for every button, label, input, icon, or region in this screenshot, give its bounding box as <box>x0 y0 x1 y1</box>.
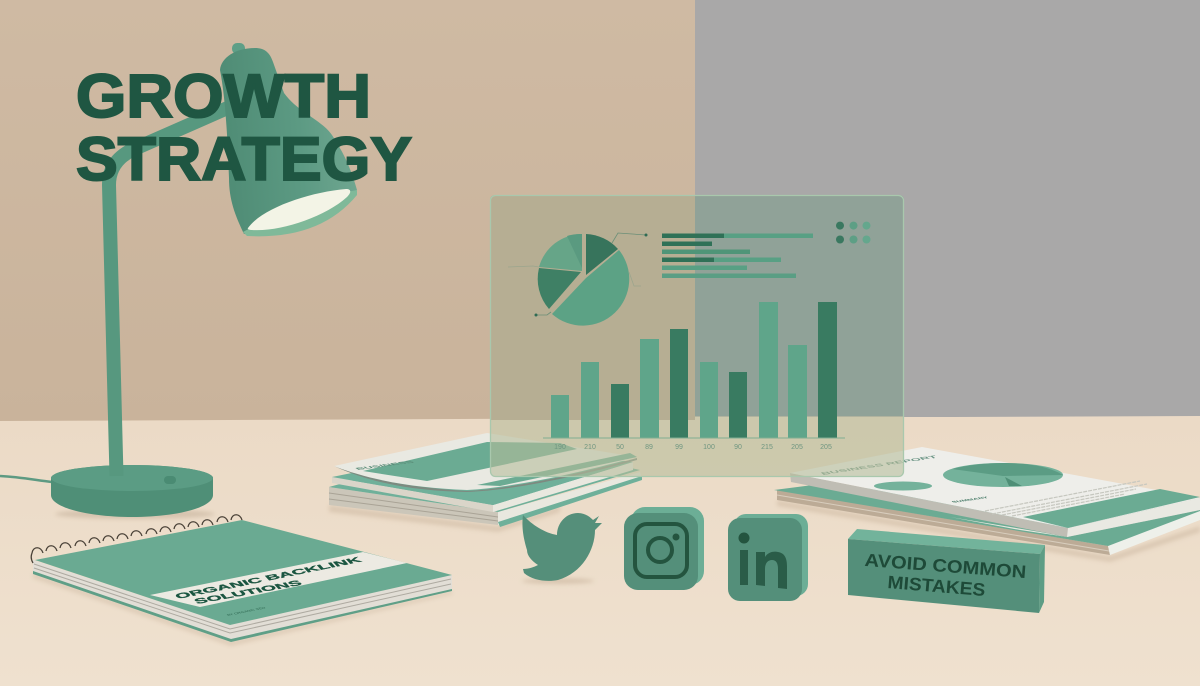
wall: grey right <box>695 0 1200 417</box>
notebook spiral binding <box>31 515 242 563</box>
brochure stack: right <box>774 447 1200 562</box>
axis labels: 205 <box>820 444 832 451</box>
icon: instagram block <box>624 507 704 590</box>
desk surface <box>0 416 1200 686</box>
report pie chart <box>943 463 1063 487</box>
axis labels: 50 <box>616 444 624 451</box>
brochure stack: right: BUSINESS REPORT <box>819 455 940 476</box>
lamp stem and arm <box>109 106 232 476</box>
icon: twitter bird <box>522 513 602 584</box>
axis labels: 100 <box>703 444 715 451</box>
brochure top sheet <box>334 458 637 492</box>
callout block: avoid common mistakes: MISTAKES <box>887 572 986 600</box>
axis labels: 190 <box>554 444 566 451</box>
icon: linkedin block <box>728 514 808 601</box>
lamp shade <box>220 43 357 236</box>
notebook title <box>173 556 365 606</box>
notebook cover <box>35 520 452 625</box>
lamp cord <box>0 476 52 482</box>
bar chart <box>543 302 845 451</box>
glass dashboard panel <box>490 195 904 476</box>
horizontal bars <box>662 234 813 278</box>
axis labels: 205 <box>791 444 803 451</box>
brochure stack: left <box>329 433 642 532</box>
axis labels: 215 <box>761 444 773 451</box>
brochure stack: left: BUSINESS <box>354 460 417 471</box>
notebook title strip <box>150 552 407 607</box>
axis labels: 90 <box>734 444 742 451</box>
report top sheet <box>790 447 1200 528</box>
lamp base <box>51 465 213 517</box>
axis labels: 89 <box>645 444 653 451</box>
axis labels <box>554 444 832 451</box>
callout block: avoid common mistakes <box>848 529 1045 613</box>
desk lamp <box>0 43 357 519</box>
notebook pages <box>33 560 452 641</box>
notebook title: SOLUTIONS <box>192 579 305 606</box>
spiral notebook <box>31 515 452 646</box>
title: GROWTH <box>76 62 371 130</box>
axis labels: 210 <box>584 444 596 451</box>
spiral notebook: BY ORGANIC SEO <box>226 606 267 617</box>
callout block: avoid common mistakes: AVOID COMMON <box>864 550 1027 582</box>
notebook title: ORGANIC BACKLINK <box>173 556 365 601</box>
axis labels: 99 <box>675 444 683 451</box>
title: STRATEGY <box>76 125 412 193</box>
pie chart <box>508 233 648 326</box>
brochure stack: right: SUMMARY <box>951 496 991 504</box>
wall: tan left <box>0 0 695 421</box>
title <box>76 62 412 193</box>
dots <box>836 222 870 244</box>
